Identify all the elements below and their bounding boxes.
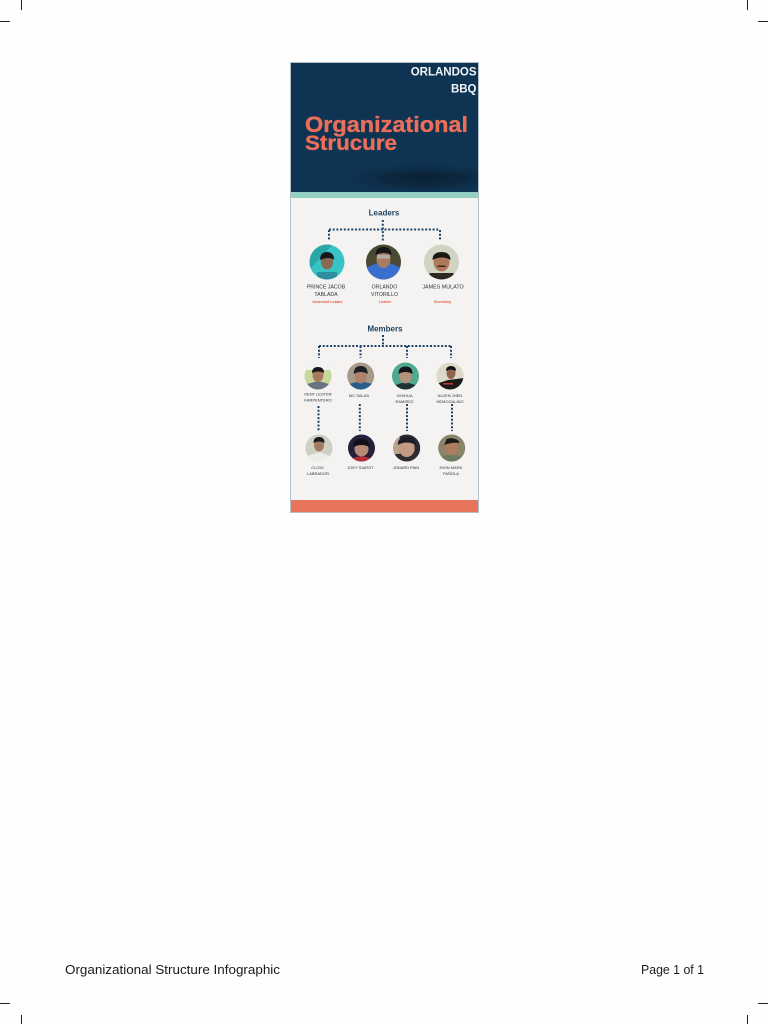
member: Joshua Ramirez: RAMIREZ — [396, 399, 414, 404]
teal band — [291, 192, 478, 198]
member: Joey Siarot: JOEY SIAROT — [347, 465, 374, 470]
member: Prince Jacob Tablada — [307, 244, 346, 304]
member: James Mulato: JAMES MULATO — [422, 284, 464, 290]
member: MC Salas — [347, 362, 375, 398]
member: Joey Siarot — [347, 434, 376, 470]
member: Orlando Vitorillo: VITORILLO — [371, 292, 398, 298]
heading: leaders: Leaders — [369, 208, 400, 218]
connector: leaders — [329, 220, 440, 241]
panel: header — [291, 63, 478, 192]
heading: members: Members — [367, 324, 403, 334]
member: Prince Jacob Tablada: Assistant Leader — [312, 300, 343, 304]
member: Kent Lester Karpentero: KARPENTERO — [304, 398, 332, 402]
member: Cloio Labrador: LABRADOR — [307, 471, 329, 476]
member: James Mulato — [422, 244, 464, 304]
member: Jhon Mark Pañola: PAÑOLA — [443, 471, 459, 476]
title: Organizational — [305, 112, 468, 137]
member: Jonard Pain: JONARD PAIN — [393, 465, 419, 470]
member: Kent Lester Karpentero — [304, 362, 332, 402]
title — [305, 112, 468, 155]
footer: page number: Page 1 of 1 — [641, 962, 704, 977]
coral footer band — [291, 500, 478, 512]
title: Strucure — [305, 132, 397, 155]
member: Alven Jhen Hemogaling — [436, 362, 464, 404]
brand name: BBQ — [451, 84, 477, 96]
member: Alven Jhen Hemogaling: HEMOGALING — [436, 399, 464, 404]
member: Alven Jhen Hemogaling: ALVEN JHEN — [438, 393, 462, 398]
member: Prince Jacob Tablada: TABLADA — [314, 292, 338, 298]
member: Jonard Pain — [393, 434, 421, 470]
member: Jhon Mark Pañola — [438, 434, 466, 476]
member: Joshua Ramirez: JUSHUA — [396, 393, 413, 398]
member: Orlando Vitorillo — [366, 244, 402, 304]
member: Cloio Labrador — [305, 434, 333, 476]
member: Prince Jacob Tablada: PRINCE JACOB — [307, 284, 346, 290]
brand name: ORLANDOS — [411, 66, 477, 78]
panel: infographic card — [290, 62, 479, 513]
member: James Mulato: Secretary — [434, 300, 452, 304]
member: MC Salas: MC SALAS — [349, 393, 369, 398]
member: Orlando Vitorillo: ORLANDO — [372, 284, 397, 290]
footer: document title: Organizational Structure Infographic — [65, 962, 281, 977]
member: Orlando Vitorillo: Leader — [379, 300, 392, 304]
member: Joshua Ramirez — [392, 362, 420, 404]
connector: members — [318, 335, 452, 431]
member: Jhon Mark Pañola: JHON MARK — [439, 465, 463, 470]
member: Kent Lester Karpentero: KENT LESTER — [304, 392, 332, 396]
member: Cloio Labrador: CLOIO — [311, 465, 324, 470]
